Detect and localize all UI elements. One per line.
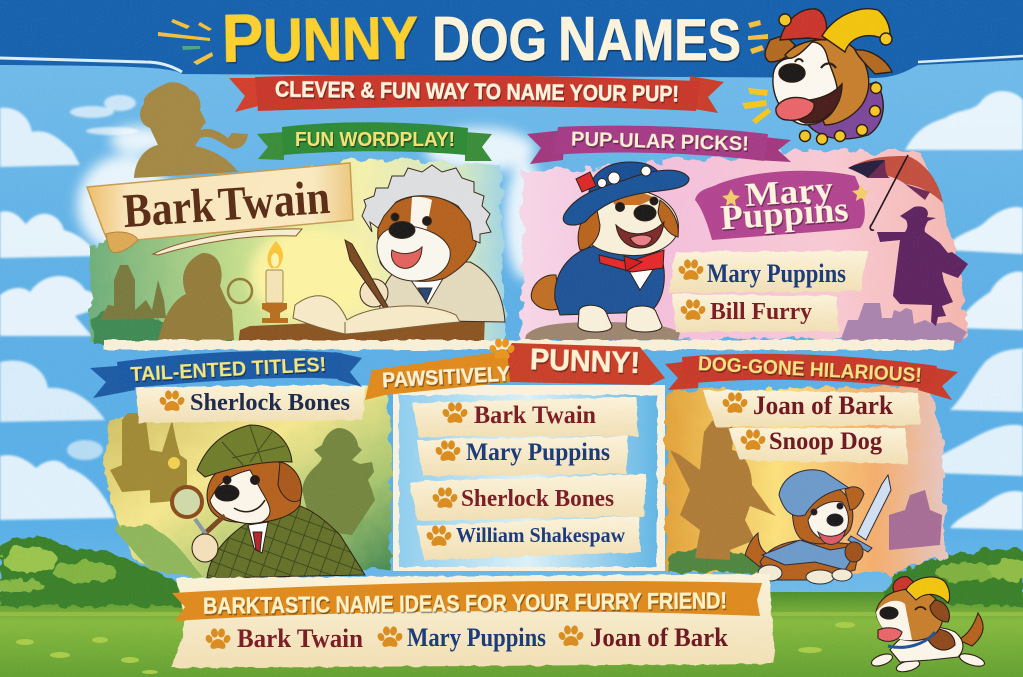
- silhouette: pipe smoker: [134, 82, 248, 178]
- ribbon: fun wordplay: FUN WORDPLAY!: [295, 129, 455, 151]
- panel: fun wordplay: [87, 82, 506, 345]
- scroll: Sherlock Bones: [409, 474, 646, 521]
- scroll: Bill Furry: [672, 294, 839, 332]
- dog: Einstein: [345, 165, 505, 322]
- ribbon: fun wordplay: [257, 122, 492, 161]
- name: Bark Twain: Bark Twain: [237, 624, 364, 653]
- ground: [668, 550, 770, 573]
- jester dog: top right: [765, 9, 892, 144]
- silhouette: city: [842, 303, 967, 343]
- clock face: [168, 457, 180, 469]
- castle silhouette: [889, 490, 942, 550]
- scroll: Sherlock Bones: Sherlock Bones: [190, 390, 350, 416]
- scroll: Mary Puppins: [417, 436, 628, 476]
- title: [221, 0, 741, 77]
- scroll: Mary Puppins: Mary Puppins: [466, 439, 610, 466]
- ribbon: tail-ented titles: TAIL-ENTED TITLES!: [130, 354, 327, 386]
- bushes: right: [880, 548, 1023, 606]
- cream backing: [172, 574, 775, 668]
- panel background wash: [666, 385, 945, 572]
- umbrella and flying silhouette: [848, 155, 968, 326]
- scroll: William Shakespaw: [417, 516, 641, 560]
- scroll: Bill Furry: Bill Furry: [710, 299, 812, 325]
- candle glow: [250, 227, 370, 323]
- white haze behind panels: [77, 126, 545, 280]
- grass field: [0, 592, 1023, 677]
- name: Joan of Bark: Joan of Bark: [590, 623, 729, 652]
- panel: barktastic name ideas: [172, 574, 775, 668]
- title: PUNNY: [221, 0, 419, 77]
- scroll: Mary Puppins: [668, 251, 868, 293]
- ribbon: pawsitively punny: PAWSITIVELY: [382, 363, 511, 392]
- dog: Sherlock: [172, 425, 365, 578]
- open book: [293, 296, 460, 334]
- clouds: right: [905, 91, 1023, 530]
- top blue banner: [0, 0, 1023, 78]
- scroll: Bark Twain: Bark Twain: [474, 402, 596, 429]
- panel: dog-gone hilarious: [665, 353, 958, 584]
- clouds: left: [0, 95, 138, 520]
- grass flecks: [0, 612, 1023, 674]
- candle: [262, 241, 288, 323]
- title sparks: [158, 19, 768, 65]
- badge: Mary Puppins: Mary: [744, 171, 834, 214]
- ribbon: pup-ular picks: [527, 126, 791, 164]
- panel: pup-ular picks: [520, 126, 968, 343]
- red subtitle ribbon: CLEVER & FUN WAY TO NAME YOUR PUP!: [275, 77, 679, 106]
- silhouette: town: [100, 265, 166, 320]
- silhouette: Joan of Arc: [670, 420, 776, 560]
- badge: Mary Puppins: [695, 171, 870, 240]
- badge: Mary Puppins: Puppins: [719, 190, 850, 237]
- foliage: [115, 524, 205, 580]
- panel background wash: [92, 158, 506, 344]
- jester dog sparks: [742, 88, 771, 124]
- blue inner panel: [399, 395, 657, 567]
- silhouette: old town: [110, 413, 187, 503]
- panel background wash: [393, 385, 665, 571]
- name: Mary Puppins: Mary Puppins: [407, 623, 546, 652]
- title: DOG: [432, 5, 547, 74]
- jester dog: running bottom right: [870, 577, 986, 674]
- ribbon: dog-gone hilarious: [665, 353, 958, 400]
- dog: knight: [745, 470, 891, 584]
- ribbon: pup-ular picks: PUP-ULAR PICKS!: [571, 129, 749, 155]
- scroll: Sherlock Bones: [136, 385, 366, 423]
- scroll: Joan of Bark: Joan of Bark: [753, 391, 894, 420]
- ribbon: pawsitively punny: PUNNY!: [529, 343, 641, 380]
- desk: [238, 315, 485, 345]
- scroll: Bark Twain: Bark Twain: [121, 171, 332, 238]
- foliage: [90, 312, 240, 345]
- scroll: Joan of Bark: [703, 390, 921, 427]
- scroll: Mary Puppins: Mary Puppins: [707, 259, 846, 288]
- scroll: Bark Twain: [413, 397, 638, 437]
- bushes: left: [0, 536, 210, 606]
- silhouette: detective with magnifier: [158, 253, 252, 342]
- scroll: William Shakespaw: William Shakespaw: [456, 523, 626, 547]
- panel background wash: [520, 150, 968, 342]
- ribbon: tail-ented titles: [90, 351, 362, 398]
- scroll: Snoop Dog: [728, 428, 908, 464]
- silhouette: detective: [302, 428, 375, 535]
- ribbon: barktastic: BARKTASTIC NAME IDEAS FOR YOUR FURRY FRIEND!: [203, 587, 727, 619]
- panel background wash: [105, 385, 390, 578]
- scroll: Snoop Dog: Snoop Dog: [769, 428, 882, 455]
- scroll: Sherlock Bones: Sherlock Bones: [461, 486, 614, 512]
- ribbon: dog-gone hilarious: DOG-GONE HILARIOUS!: [697, 353, 922, 387]
- panel: pawsitively punny: [365, 338, 665, 571]
- title: NAMES: [558, 5, 741, 74]
- ribbon: pawsitively punny: [365, 338, 665, 400]
- dog: Mary pup: [525, 162, 689, 340]
- panel gap backing: [104, 340, 954, 350]
- scroll: Bark Twain: [87, 163, 353, 255]
- panel: tail-ented titles: [90, 351, 390, 580]
